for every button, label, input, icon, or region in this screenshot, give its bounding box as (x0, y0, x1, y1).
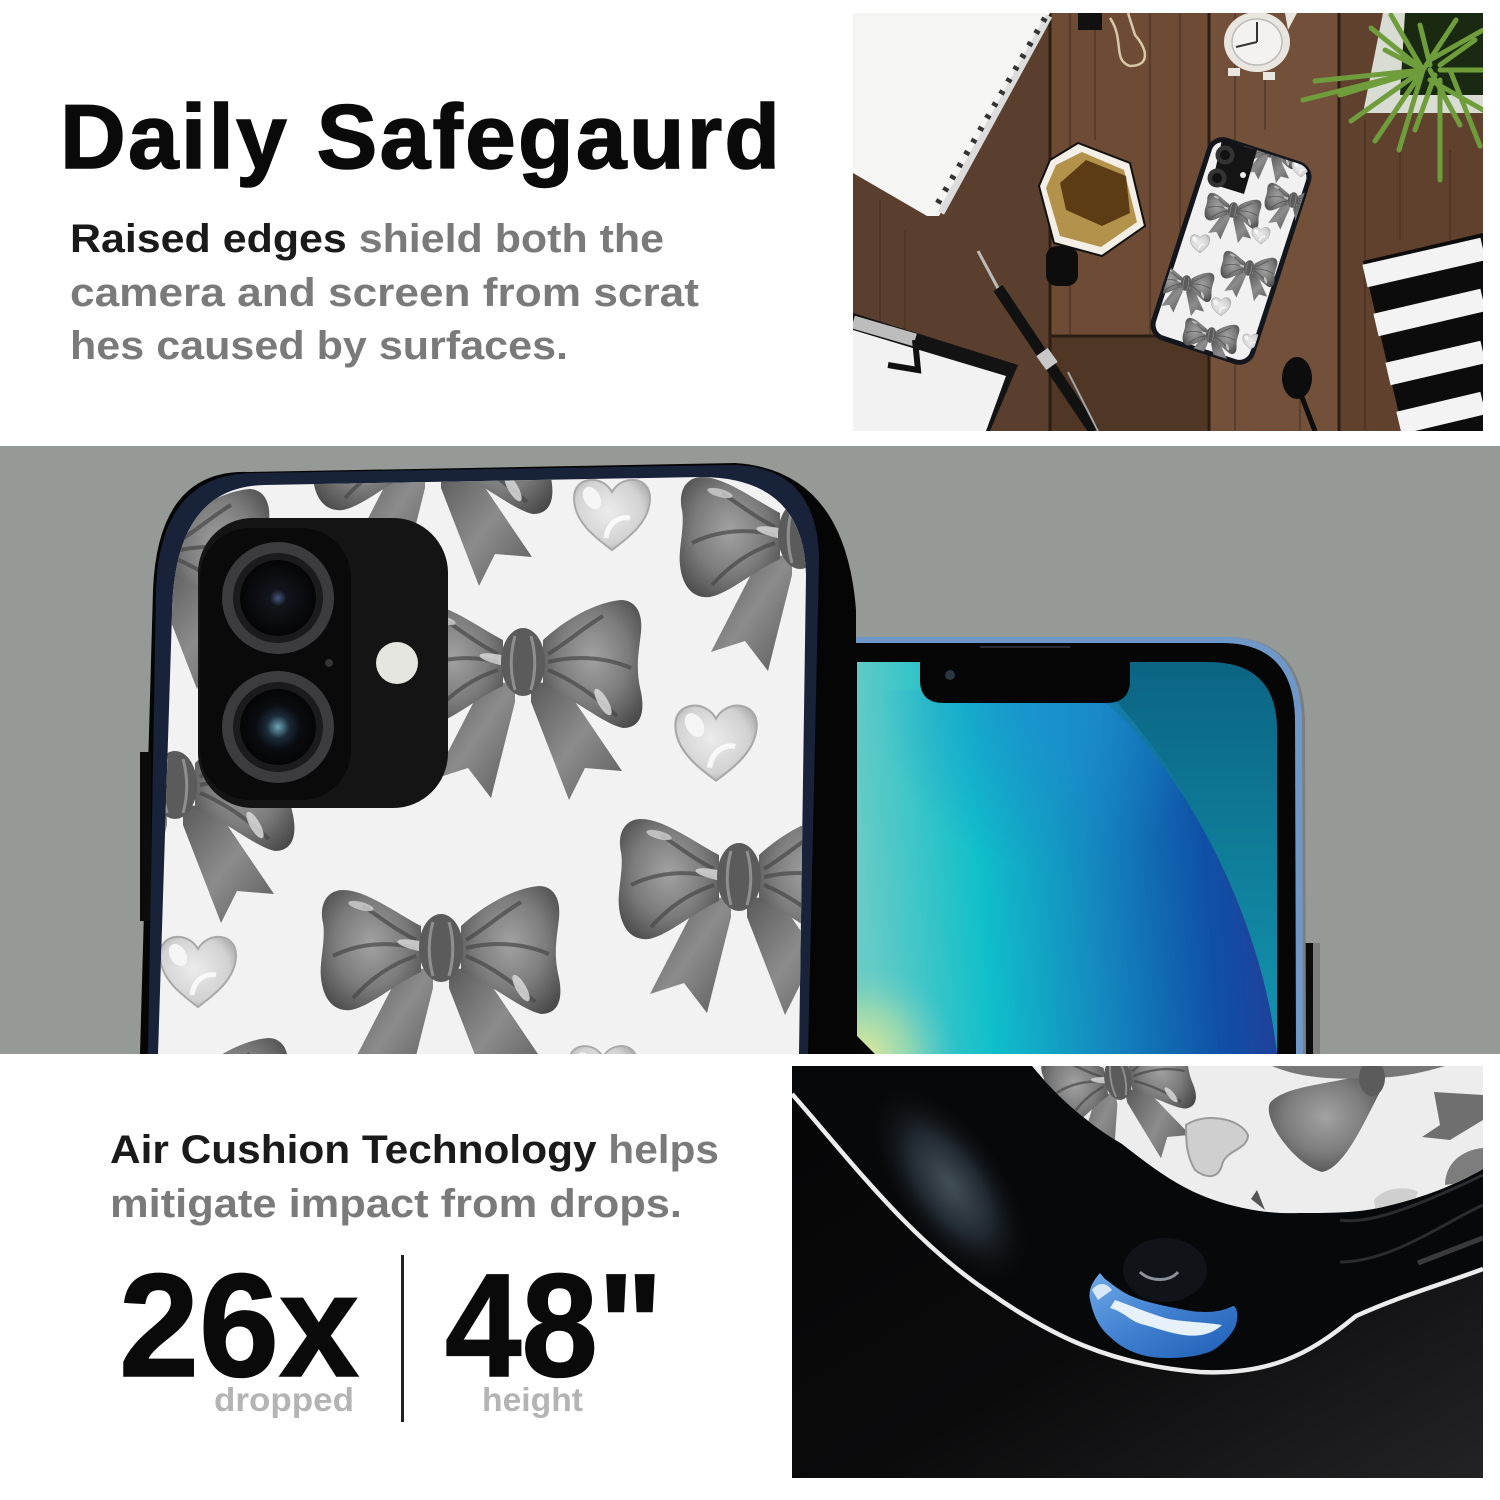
case bumper (1158, 1170, 1483, 1370)
text block: air cushion description: mitigate impact from drops. (110, 1182, 682, 1226)
phone back: case (140, 463, 856, 1054)
mini phone case (1150, 137, 1312, 365)
text block: raised edges description: hes caused by surfaces. (70, 324, 568, 368)
print area with bows (1032, 1066, 1483, 1214)
bow and heart pattern (160, 477, 806, 1054)
water droplet (1089, 1273, 1237, 1358)
alarm clock (1224, 12, 1297, 80)
text block: raised edges description: camera and screen from scrat (70, 271, 699, 315)
text block: raised edges description (70, 217, 699, 368)
panel: grey band with phones (0, 446, 1500, 1054)
clipboard (853, 313, 1018, 431)
binder clip (1078, 13, 1145, 66)
spoon (1282, 357, 1315, 431)
text block: air cushion description (110, 1128, 719, 1226)
button bump above droplet (1123, 1238, 1207, 1302)
plant (1303, 13, 1483, 180)
photo: case edge close-up (792, 1028, 1483, 1478)
title: Daily Safegaurd (60, 87, 780, 188)
striped notebook (1363, 233, 1483, 431)
side port groove (1340, 1175, 1483, 1262)
divider (401, 1255, 404, 1422)
coffee cup (1039, 143, 1145, 286)
notebook (853, 13, 1050, 216)
edge highlight line (792, 1094, 1483, 1372)
stat: 48 inch height: height (482, 1381, 583, 1418)
camera module (198, 518, 448, 808)
stat: 26x dropped: 26x (119, 1244, 359, 1408)
stat: 48 inch height: 48" (445, 1244, 663, 1408)
stat: 26x dropped: dropped (214, 1381, 354, 1418)
pen (978, 251, 1098, 431)
text block: air cushion description: Air Cushion Technology helps (110, 1128, 719, 1172)
text block: raised edges description: Raised edges shield both the (70, 217, 664, 261)
photo: desk flat lay with phone case (853, 12, 1483, 431)
phone front with notch and wallpaper (856, 637, 1320, 1054)
